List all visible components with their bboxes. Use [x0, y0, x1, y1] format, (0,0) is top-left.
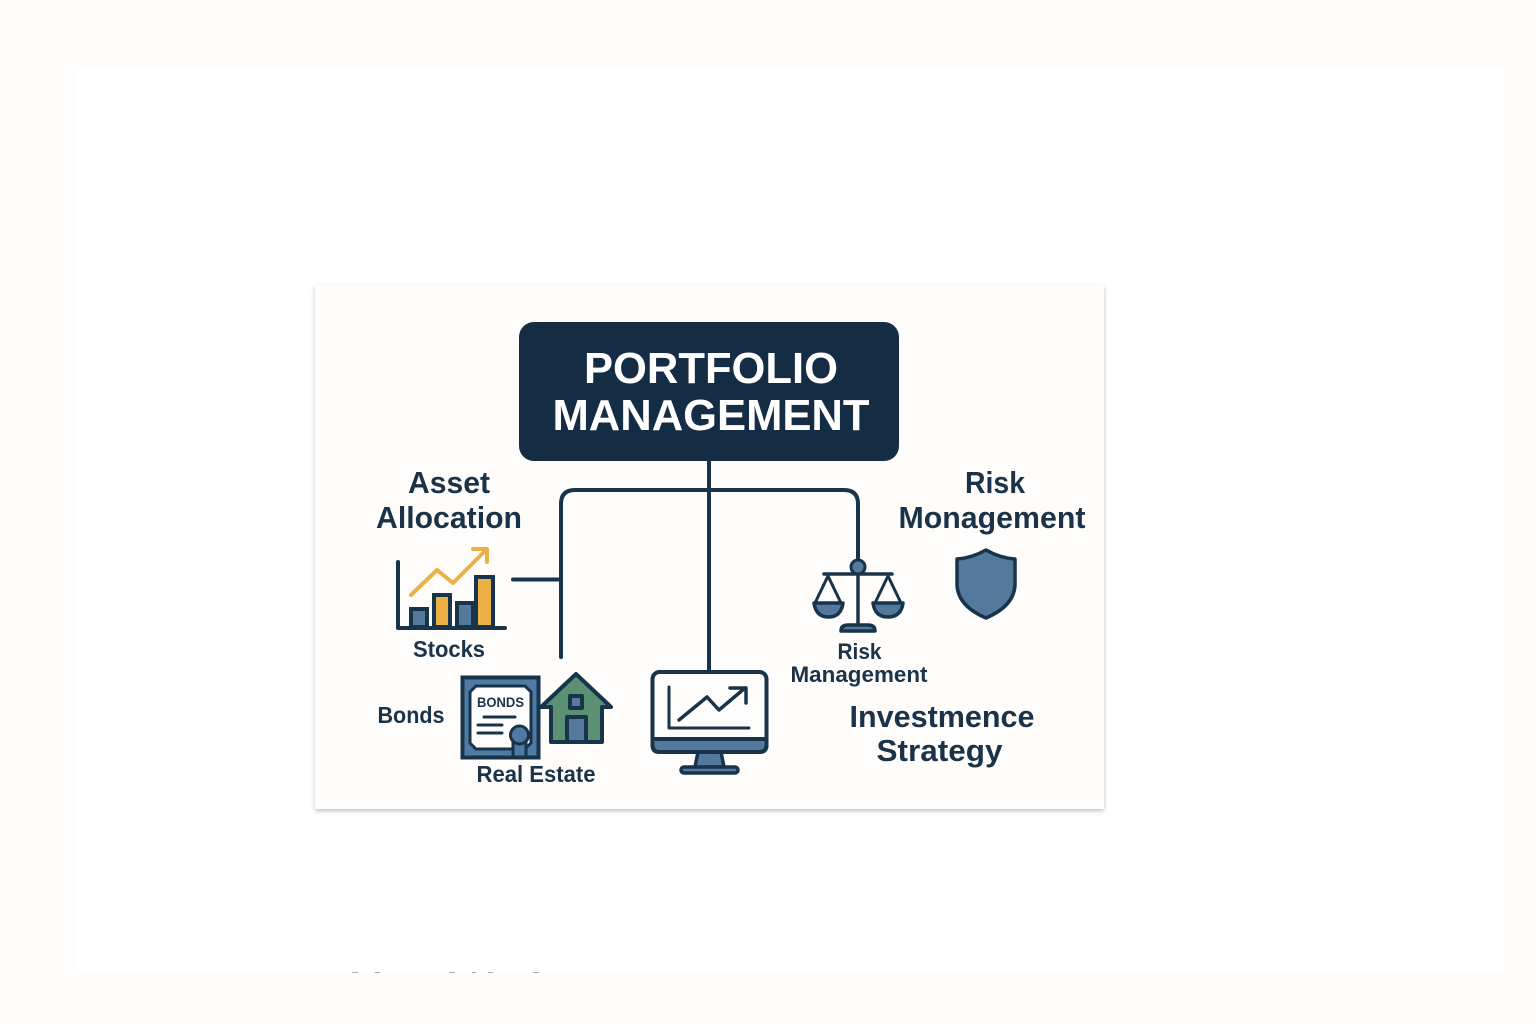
- title box: [519, 322, 899, 461]
- heading: asset allocation: Asset: [408, 465, 490, 500]
- icon: stocks bar chart: [398, 549, 505, 628]
- panel: portfolio management card: [315, 285, 1104, 809]
- label: risk management: Management: [790, 662, 928, 687]
- heading: asset allocation: Allocation: [376, 500, 522, 535]
- heading: investment strategy: [850, 699, 1034, 768]
- icon: house: [541, 674, 611, 742]
- heading: asset allocation: [376, 465, 522, 535]
- label: stocks: Stocks: [413, 636, 485, 662]
- heading: risk monagement: [898, 465, 1086, 535]
- icon: monitor with chart: [652, 672, 766, 773]
- label: risk management: [790, 639, 928, 687]
- icon: balance scale: [814, 560, 903, 631]
- label: bonds: Bonds: [378, 702, 444, 728]
- heading: risk monagement: Risk: [965, 465, 1026, 500]
- label: risk management: Risk: [838, 639, 882, 664]
- icon: shield: [957, 550, 1015, 618]
- heading: investment strategy: Investmence: [850, 699, 1034, 734]
- title box: PORTFOLIO: [584, 344, 838, 393]
- icon: bond certificate: [462, 678, 538, 758]
- heading: risk monagement: Monagement: [898, 500, 1086, 535]
- icon: bond certificate: BONDS: [477, 694, 524, 710]
- heading: investment strategy: Strategy: [876, 733, 1003, 768]
- label: real estate: Real Estate: [476, 761, 596, 787]
- title box: MANAGEMENT: [552, 391, 870, 440]
- connector lines: [513, 461, 858, 672]
